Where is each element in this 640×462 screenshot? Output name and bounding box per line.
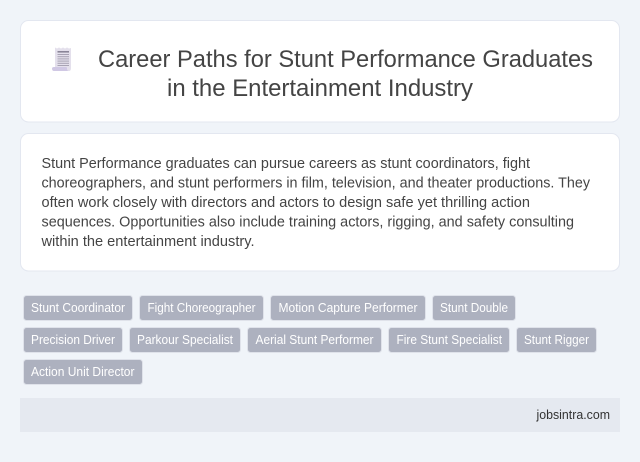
tag: Fire Stunt Specialist: Fire Stunt Specialist	[396, 333, 502, 347]
heading: title	[98, 46, 593, 102]
tag: Stunt Rigger	[516, 328, 596, 352]
text block: description: Stunt Performance graduates can pursue careers as stunt coordinators, fight	[42, 156, 530, 172]
tag: Stunt Double	[432, 296, 516, 320]
heading: title: in the Entertainment Industry	[167, 75, 474, 102]
tag: Fight Choreographer	[140, 296, 264, 320]
panel: title card	[20, 20, 620, 122]
panel: description card	[20, 134, 620, 271]
footer text: site name: jobsintra.com	[536, 408, 610, 422]
tag: Aerial Stunt Performer	[248, 328, 382, 352]
tag: Fight Choreographer: Fight Choreographer	[148, 301, 256, 315]
tag: Stunt Coordinator	[24, 296, 132, 320]
tag: Precision Driver: Precision Driver	[31, 333, 115, 347]
footer bar	[20, 398, 620, 432]
tag: Motion Capture Performer: Motion Capture Performer	[278, 301, 418, 315]
tags: career paths	[24, 296, 596, 384]
tag: Stunt Double: Stunt Double	[440, 301, 508, 315]
icon: document scroll	[52, 48, 71, 71]
tag: Precision Driver	[24, 328, 122, 352]
tag: Stunt Coordinator: Stunt Coordinator	[31, 301, 125, 315]
heading: title: Career Paths for Stunt Performance Graduates	[98, 46, 593, 73]
tag: Action Unit Director: Action Unit Director	[31, 365, 134, 379]
text block: description: often work closely with directors and actors to design safe yet thrilling action	[42, 195, 530, 211]
tag: Fire Stunt Specialist	[388, 328, 510, 352]
tag: Parkour Specialist: Parkour Specialist	[137, 333, 233, 347]
tag: Motion Capture Performer	[270, 296, 426, 320]
text block: description	[40, 156, 591, 250]
tag: Aerial Stunt Performer: Aerial Stunt Performer	[256, 333, 374, 347]
text block: description: sequences. Opportunities also include training actors, rigging, and safety consulting	[42, 214, 574, 230]
text block: description: choreographers, and stunt performers in film, television, and theater productions. They	[42, 176, 591, 192]
tag: Stunt Rigger: Stunt Rigger	[524, 333, 589, 347]
text block: description: within the entertainment industry.	[40, 234, 255, 250]
tag: Action Unit Director	[24, 360, 142, 384]
tag: Parkour Specialist	[130, 328, 240, 352]
